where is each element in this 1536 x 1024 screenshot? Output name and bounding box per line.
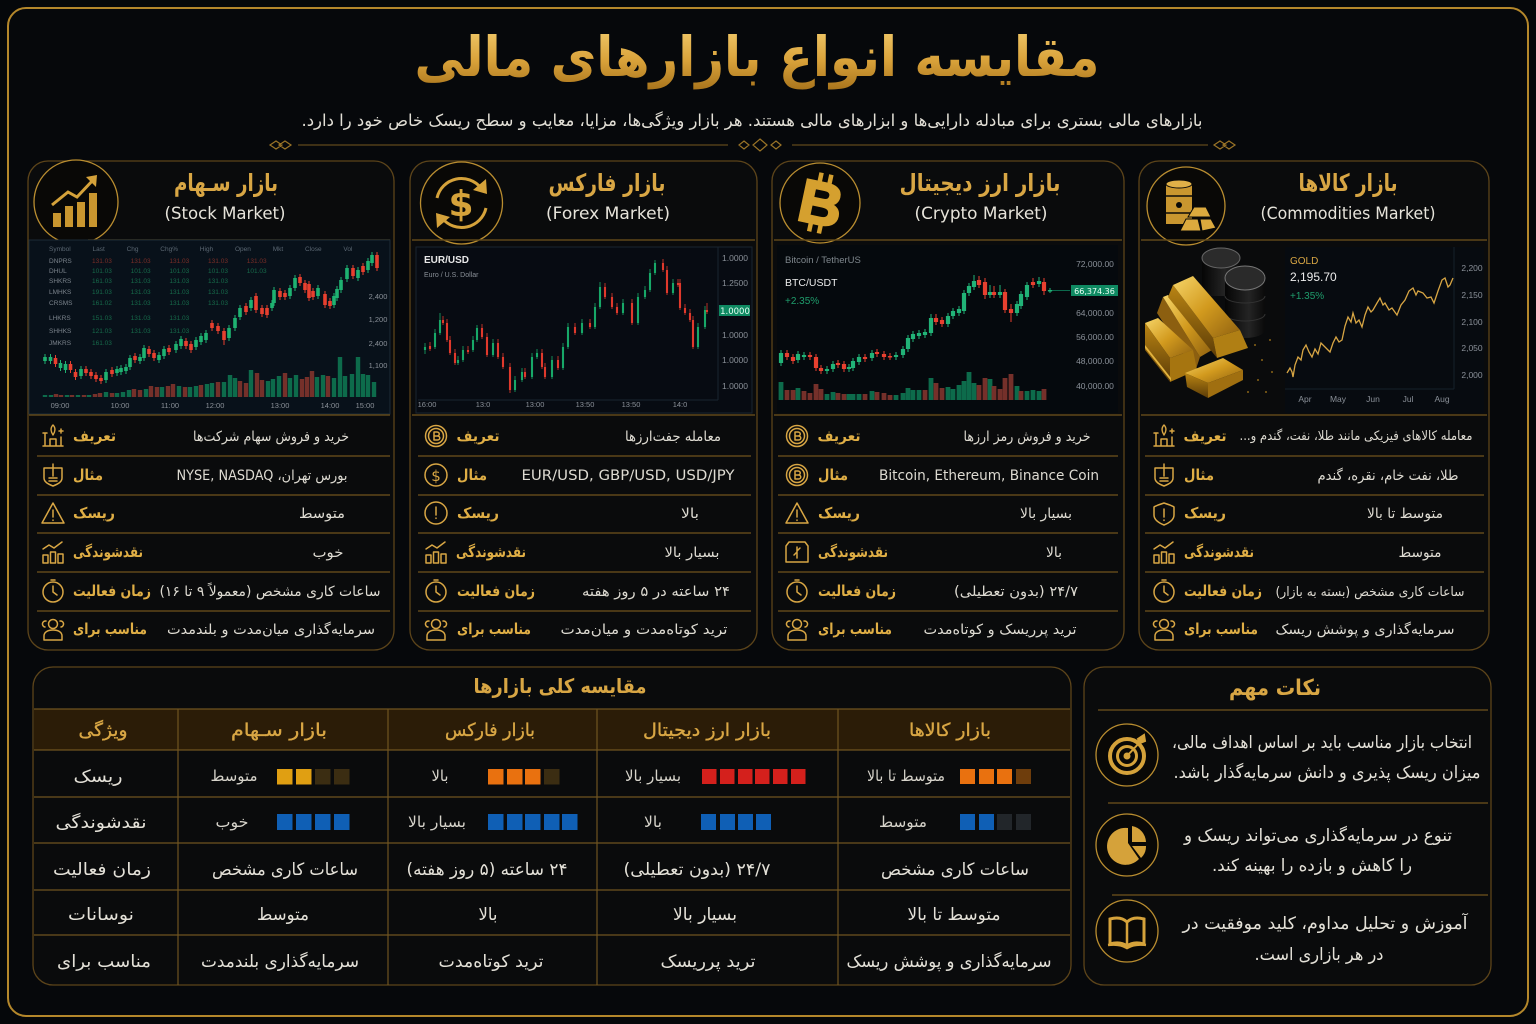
- label: trading hours: زمان فعالیت: [73, 582, 151, 600]
- heading: crypto: بازار ارز دیجیتال: [900, 169, 1060, 197]
- note: education: [1096, 900, 1469, 965]
- icon: risk: [42, 503, 64, 523]
- value: liquidity: متوسط: [1398, 545, 1442, 561]
- icon: dollar coin: $: [431, 467, 441, 485]
- value: example: Bitcoin, Ethereum, Binance Coin: [879, 468, 1099, 484]
- row: liquidity: [786, 542, 1062, 562]
- quote table: 161.03 131.03 131.03 131.03: [92, 278, 228, 285]
- label: example: مثال: [1184, 466, 1214, 484]
- note: diversification: تنوع در سرمایه‌گذاری می‌تواند ریسک و: [1183, 825, 1452, 846]
- icon: bitcoin: B: [793, 166, 849, 241]
- chart labels: 1.0000: [722, 253, 748, 263]
- chart labels: Bitcoin / TetherUS: [785, 255, 861, 266]
- icon: liquidity: [786, 542, 808, 562]
- chart labels: EUR/USD: [424, 255, 469, 266]
- icon: bitcoin: [780, 163, 860, 243]
- icon: definition: [426, 426, 446, 446]
- label: suitable for: مناسب برای: [457, 620, 531, 638]
- row: volatility: [68, 905, 1000, 925]
- chart labels: +1.35%: [1290, 291, 1324, 302]
- icon: definition: [43, 425, 63, 446]
- value: liquidity: بالا: [1046, 545, 1062, 561]
- row: liquidity: خوب: [216, 813, 248, 831]
- table header row: بازار سـهام: [231, 720, 327, 741]
- chart labels: BTC/USDT: [785, 277, 838, 289]
- icon: dollar coin: [425, 464, 447, 486]
- label: definition: تعریف: [1184, 427, 1226, 445]
- chart labels: Apr: [1298, 394, 1312, 404]
- value: suitable for: ترید پرریسک و کوتاه‌مدت: [924, 622, 1077, 638]
- chart labels: [418, 253, 750, 409]
- icon: clock: [43, 580, 63, 602]
- row: suitable for: ترید پرریسک: [660, 952, 756, 972]
- row: trading hours: [1154, 580, 1464, 602]
- row: definition: [426, 426, 721, 446]
- label: liquidity: نقدشوندگی: [1184, 543, 1254, 561]
- line chart: gold: [1285, 247, 1484, 413]
- row: suitable for: [786, 620, 1077, 640]
- chart labels: 1.0000: [722, 330, 748, 340]
- label: example: مثال: [457, 466, 487, 484]
- label: example: مثال: [818, 466, 848, 484]
- row: trading hours: ۲۴ ساعته (۵ روز هفته): [406, 860, 568, 880]
- value: trading hours: ساعات کاری مشخص (بسته به بازار): [1276, 585, 1464, 600]
- chart labels: 1.2500: [722, 278, 748, 288]
- volume bars: [45, 357, 374, 397]
- axis labels: 12:00: [206, 401, 224, 410]
- row: risk: متوسط: [210, 767, 258, 785]
- axis labels: 1,100: [369, 361, 387, 370]
- icon: people: [42, 620, 64, 640]
- row: risk: ریسک: [74, 767, 122, 787]
- icon: example: [44, 464, 62, 486]
- rating: stock risk: [277, 769, 350, 784]
- rating: commodities risk: [960, 769, 1031, 784]
- axis labels: 2,400: [369, 292, 387, 301]
- value: risk: متوسط: [299, 506, 345, 522]
- title: مقایسه انواع بازارهای مالی: [414, 25, 1100, 90]
- icon: liquidity: [1154, 542, 1174, 563]
- chart labels: 1.0000: [722, 355, 748, 365]
- chart labels: +2.35%: [785, 296, 819, 307]
- row: liquidity: بسیار بالا: [408, 813, 466, 831]
- candlesticks: [45, 252, 377, 384]
- axis labels: 15:00: [356, 401, 374, 410]
- chart labels: [785, 255, 1118, 391]
- chart labels: Jun: [1366, 394, 1380, 404]
- value: risk: متوسط تا بالا: [1367, 506, 1443, 522]
- value: risk: بسیار بالا: [1020, 506, 1072, 522]
- value: example: طلا، نفت خام، نقره، گندم: [1318, 467, 1458, 484]
- note: diversification: را کاهش و بازده را بهینه کند.: [1212, 856, 1412, 876]
- row: trading hours: ۲۴/۷ (بدون تعطیلی): [624, 860, 770, 880]
- label: trading hours: زمان فعالیت: [457, 582, 535, 600]
- icon: bitcoin coin: [786, 426, 808, 446]
- row: suitable for: [1153, 620, 1454, 640]
- row: suitable for: [425, 620, 728, 640]
- row: liquidity: [56, 812, 1031, 833]
- axis labels: 13:00: [271, 401, 289, 410]
- chart labels: 2,050: [1461, 343, 1483, 353]
- row: example: [786, 464, 1099, 486]
- row: definition: [1154, 425, 1472, 446]
- chart labels: Jul: [1403, 394, 1414, 404]
- row: suitable for: [42, 620, 375, 640]
- row: trading hours: [787, 580, 1078, 602]
- quote table: Symbol Last Chg Chg% High Open Mkt Close Vol: [49, 246, 353, 253]
- value: trading hours: ۲۴/۷ (بدون تعطیلی): [954, 584, 1078, 600]
- note: choosing a market: میزان ریسک پذیری و دانش سرمایه‌گذار باشد.: [1174, 762, 1480, 783]
- chart labels: 13:50: [622, 400, 640, 409]
- value: risk: بالا: [681, 506, 699, 522]
- chart labels: Euro / U.S. Dollar: [424, 272, 479, 279]
- axis labels: 2,400: [369, 339, 387, 348]
- note: diversification: [1096, 814, 1452, 876]
- icon: barrel and gold bars: [1147, 167, 1225, 245]
- table title: مقایسه کلی بازارها: [474, 674, 646, 698]
- panel: key notes: [1084, 667, 1491, 985]
- icon: dollar exchange: [420, 162, 502, 244]
- row: example: [1155, 464, 1458, 486]
- chart labels: 16:00: [418, 400, 436, 409]
- row: liquidity: [43, 542, 344, 563]
- row: volatility: نوسانات: [68, 905, 134, 925]
- icon: clock: [787, 580, 807, 602]
- table header row: [34, 709, 1070, 750]
- chart labels: 2,200: [1461, 263, 1483, 273]
- chart labels: 66,374.36: [1074, 287, 1115, 296]
- row: liquidity: بالا: [644, 813, 662, 831]
- row: risk: بالا: [432, 767, 448, 785]
- label: trading hours: زمان فعالیت: [1184, 582, 1262, 600]
- row: risk: [425, 502, 699, 524]
- row: trading hours: [53, 860, 1029, 880]
- note: education: در هر بازاری است.: [1254, 945, 1384, 965]
- value: definition: معامله جفت‌ارزها: [625, 429, 721, 445]
- icon: risk: [786, 503, 808, 523]
- label: definition: تعریف: [818, 427, 860, 445]
- panel: stock market: [28, 160, 394, 650]
- axis labels: 10:00: [111, 401, 129, 410]
- icon: people: [1153, 620, 1175, 640]
- row: volatility: متوسط: [257, 905, 309, 925]
- icon: stock growth: [34, 160, 118, 244]
- row: liquidity: متوسط: [879, 813, 927, 831]
- label: liquidity: نقدشوندگی: [456, 543, 526, 561]
- value: trading hours: ۲۴ ساعته در ۵ روز هفته: [582, 584, 730, 600]
- quote table: 101.03 101.03 101.03 101.03 101.03: [92, 268, 267, 275]
- row: suitable for: ترید کوتاه‌مدت: [438, 952, 544, 972]
- axis labels: 09:00: [51, 401, 69, 410]
- icon: people: [786, 620, 808, 640]
- value: definition: خرید و فروش رمز ارزها: [964, 429, 1090, 445]
- icon: pie chart: [1096, 814, 1158, 876]
- ornament divider: [270, 139, 1235, 151]
- label: liquidity: نقدشوندگی: [73, 543, 143, 561]
- row: trading hours: زمان فعالیت: [53, 860, 151, 880]
- chart labels: 48,000.00: [1076, 356, 1114, 366]
- chart labels: [1290, 256, 1483, 404]
- chart labels: 13:00: [526, 400, 544, 409]
- icon: risk: [425, 502, 447, 524]
- chart labels: GOLD: [1290, 256, 1318, 267]
- chart labels: May: [1330, 394, 1347, 404]
- icon: dollar exchange: $: [448, 184, 474, 225]
- quote table: SHKRS: [49, 278, 72, 285]
- rating: stock liquidity: [277, 814, 350, 830]
- rating: commodities liquidity: [960, 814, 1031, 830]
- row: trading hours: ساعات کاری مشخص: [212, 860, 358, 880]
- chart labels: 13:0: [476, 400, 490, 409]
- rating: forex liquidity: [488, 814, 578, 830]
- quote table: 151.03 131.03 131.03: [92, 315, 190, 322]
- value: definition: معامله کالاهای فیزیکی مانند طلا، نفت، گندم و...: [1240, 428, 1472, 444]
- label: definition: تعریف: [73, 427, 116, 445]
- row: risk: [1154, 503, 1443, 525]
- candlestick chart: BTC/USDT: [777, 245, 1118, 413]
- label: risk: ریسک: [73, 504, 115, 522]
- value: definition: خرید و فروش سهام شرکت‌ها: [193, 429, 349, 445]
- row: example: [425, 464, 735, 486]
- row: definition: [43, 425, 349, 446]
- value: liquidity: خوب: [312, 545, 344, 561]
- chart labels: 72,000.00: [1076, 259, 1114, 269]
- candlestick chart: EUR/USD: [416, 247, 752, 413]
- note: choosing a market: انتخاب بازار مناسب باید بر اساس اهداف مالی،: [1172, 733, 1472, 753]
- icon: target: [1096, 724, 1158, 786]
- quote table: 161.02 131.03 131.03 131.03: [92, 300, 228, 307]
- panel: crypto market: [772, 161, 1124, 650]
- chart labels: 2,100: [1461, 317, 1483, 327]
- rating: forex risk: [488, 769, 560, 784]
- chart labels: 1.0000: [722, 381, 748, 391]
- subheading: forex: (Forex Market): [546, 204, 670, 224]
- panel: forex market: [410, 161, 757, 650]
- quote table: 161.03: [92, 340, 112, 347]
- label: definition: تعریف: [456, 427, 500, 445]
- quote table: LHKRS: [49, 315, 71, 322]
- value: liquidity: بسیار بالا: [664, 545, 720, 561]
- icon: bitcoin coin: [786, 464, 808, 486]
- row: volatility: متوسط تا بالا: [908, 905, 1000, 925]
- icon: definition: [1154, 425, 1174, 446]
- panel: commodities market: [1139, 161, 1489, 650]
- label: suitable for: مناسب برای: [73, 620, 147, 638]
- gold price line: [1287, 278, 1453, 377]
- icon: liquidity: [43, 542, 63, 563]
- icon: clock: [426, 580, 446, 602]
- row: trading hours: [43, 580, 380, 602]
- axis labels: 1,200: [369, 315, 387, 324]
- subheading: commodities: (Commodities Market): [1260, 204, 1436, 224]
- chart labels: 1.0000: [720, 307, 750, 317]
- subheading: crypto: (Crypto Market): [914, 204, 1048, 224]
- row: example: [44, 464, 348, 486]
- row: suitable for: سرمایه‌گذاری بلندمدت: [201, 951, 359, 972]
- candlestick chart with quote table: [29, 240, 390, 414]
- label: liquidity: نقدشوندگی: [818, 543, 888, 561]
- intro text: بازارهای مالی بستری برای مبادله دارایی‌ها و ابزارهای مالی هستند. هر بازار ویژگی‌ها، مزایا، معایب و سطح ریسک خاص خود را دارد.: [302, 111, 1202, 131]
- illustration: gold bars and oil barrels: [1145, 248, 1273, 398]
- row: risk: متوسط تا بالا: [867, 767, 945, 785]
- subheading: stock: (Stock Market): [164, 204, 286, 224]
- heading: stock: بازار سـهام: [174, 169, 278, 197]
- table header row: بازار ارز دیجیتال: [643, 720, 771, 741]
- row: suitable for: [57, 951, 1052, 972]
- quote table: SHHKS: [49, 328, 72, 335]
- chart labels: 14:0: [673, 400, 687, 409]
- row: volatility: بالا: [478, 905, 498, 925]
- label: risk: ریسک: [1184, 504, 1226, 522]
- label: trading hours: زمان فعالیت: [818, 582, 896, 600]
- heading: forex: بازار فارکس: [548, 169, 666, 197]
- axis labels: [51, 292, 387, 410]
- chart labels: 64,000.00: [1076, 308, 1114, 318]
- rating: crypto risk: [702, 769, 806, 784]
- value: suitable for: ترید کوتاه‌مدت و میان‌مدت: [560, 622, 728, 638]
- label: risk: ریسک: [818, 504, 860, 522]
- quote table: LMHKS: [49, 289, 72, 296]
- label: suitable for: مناسب برای: [818, 620, 892, 638]
- row: trading hours: [426, 580, 730, 602]
- candles: [425, 259, 707, 393]
- chart labels: 2,000: [1461, 370, 1483, 380]
- quote table: 191.03 131.03 131.03 131.03: [92, 289, 228, 296]
- value: example: EUR/USD, GBP/USD, USD/JPY: [522, 468, 735, 484]
- icon: people: [425, 620, 447, 640]
- icon: liquidity: [426, 542, 446, 563]
- candles: [781, 275, 1050, 374]
- chart labels: 13:50: [576, 400, 594, 409]
- icon: risk: [1154, 503, 1174, 525]
- value: trading hours: ساعات کاری مشخص (معمولاً ۹ تا ۱۶): [159, 582, 380, 600]
- quote table: CRSMS: [49, 300, 73, 307]
- quote table: [49, 246, 353, 347]
- value: example: بورس تهران، NYSE, NASDAQ: [176, 468, 348, 484]
- chart labels: 40,000.00: [1076, 381, 1114, 391]
- note: choosing a market: [1096, 724, 1480, 786]
- notes title: نکات مهم: [1229, 676, 1321, 701]
- row: volatility: بسیار بالا: [673, 905, 737, 925]
- chart labels: 56,000.00: [1076, 332, 1114, 342]
- row: risk: [42, 503, 345, 523]
- table header row: بازار فارکس: [445, 720, 535, 741]
- chart labels: 2,195.70: [1290, 270, 1337, 284]
- axis labels: 11:00: [161, 401, 179, 410]
- heading: commodities: بازار کالاها: [1298, 169, 1398, 197]
- icon: open book: [1096, 900, 1158, 962]
- quote table: DHUL: [49, 268, 67, 275]
- axis labels: 14:00: [321, 401, 339, 410]
- quote table: DNPRS: [49, 258, 72, 265]
- row: suitable for: مناسب برای: [57, 952, 151, 972]
- label: example: مثال: [73, 466, 103, 484]
- icon: example: [1155, 464, 1173, 486]
- row: suitable for: سرمایه‌گذاری و پوشش ریسک: [846, 951, 1052, 972]
- row: liquidity: [1154, 542, 1442, 563]
- row: trading hours: ساعات کاری مشخص: [881, 860, 1029, 880]
- panel: comparison table: [33, 667, 1071, 985]
- icon: clock: [1154, 580, 1174, 602]
- row: risk: [786, 503, 1072, 523]
- row: risk: بسیار بالا: [625, 767, 681, 785]
- row: liquidity: نقدشوندگی: [56, 812, 146, 833]
- table header row: ویژگی: [78, 719, 128, 741]
- chart labels: 2,150: [1461, 290, 1483, 300]
- chart labels: Aug: [1434, 394, 1450, 404]
- row: liquidity: [426, 542, 720, 563]
- quote table: JMKRS: [49, 340, 72, 347]
- value: suitable for: سرمایه‌گذاری میان‌مدت و بلندمدت: [167, 621, 375, 638]
- row: definition: [786, 426, 1090, 446]
- label: suitable for: مناسب برای: [1184, 620, 1258, 638]
- quote table: 121.03 131.03 131.03: [92, 328, 190, 335]
- volume bars: [781, 372, 1044, 400]
- value: suitable for: سرمایه‌گذاری و پوشش ریسک: [1276, 621, 1454, 638]
- label: risk: ریسک: [457, 504, 499, 522]
- note: education: آموزش و تحلیل مداوم، کلید موفقیت در: [1181, 912, 1469, 934]
- quote table: 131.03 131.03 131.03 131.03 131.03: [92, 258, 267, 265]
- row: risk: [74, 767, 1031, 787]
- rating: crypto liquidity: [701, 814, 771, 830]
- table header row: بازار کالاها: [909, 720, 991, 741]
